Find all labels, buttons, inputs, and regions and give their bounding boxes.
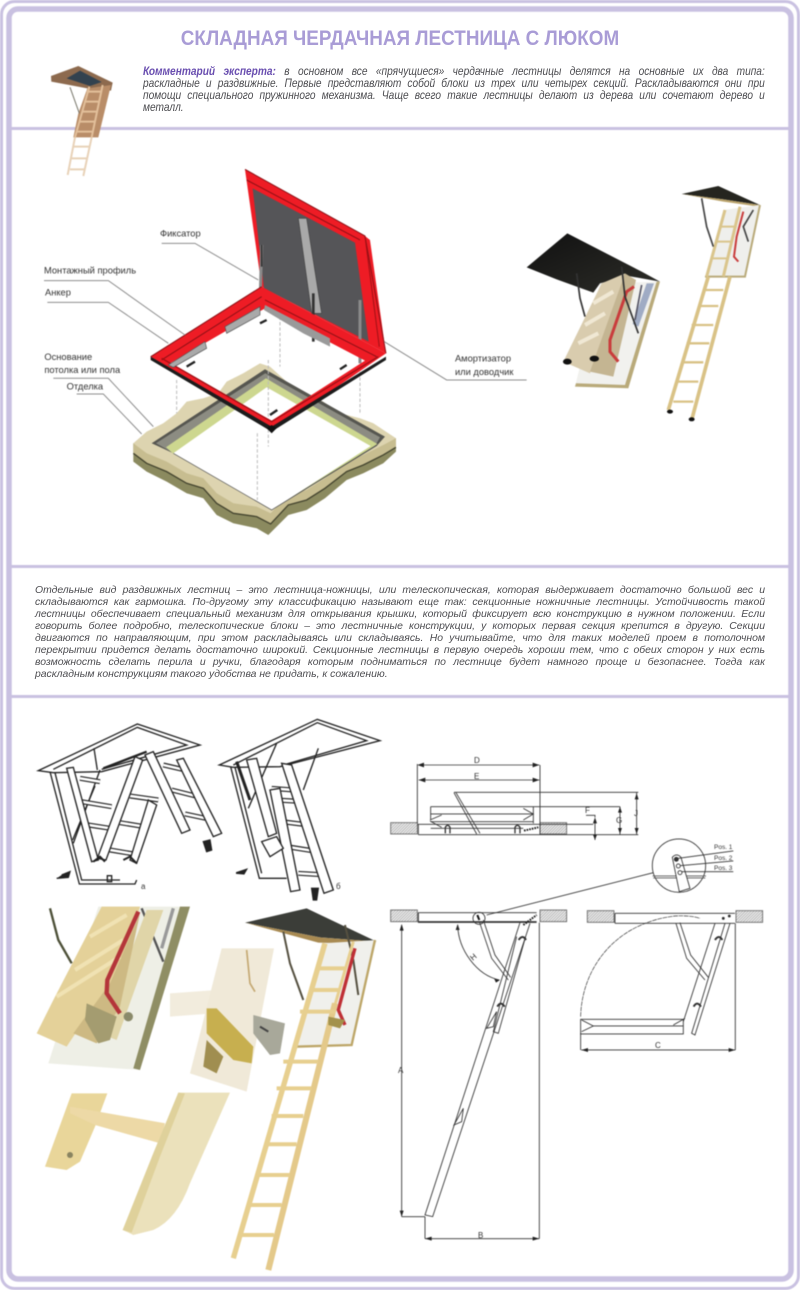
dimension letters, top view: J [634,809,638,818]
chart: drawing b, telescopic ladder [219,719,380,900]
chart: drawing a, scissor ladder [38,724,222,884]
chart: hatch exploded diagram [44,169,527,535]
position labels: Pos. 3 [714,865,733,872]
callout labels: Основание [44,352,92,362]
position labels [714,844,733,872]
lid [245,169,386,363]
dashed guides [177,317,360,500]
text block: expert comment: металл. [143,100,184,114]
dimension letters, top view: E [474,772,479,781]
dimension letters, top view: G [616,816,622,825]
text block: scissor and telescopic ladders: лестницы обеспечивает специальный механизм для открывания крышки, который фиксирует всю конструкцию в нужном положении. Если [35,609,765,620]
chart: magnified detail with positions [487,839,733,915]
text block: scissor and telescopic ladders: возможность сделать перила и ручки, благодаря которым подниматься по лестнице будет намного проще и безопаснее. Тогда как [35,657,765,668]
chart: technical drawing folding arc [581,911,763,1052]
text block: scissor and telescopic ladders: двигаются по направляющим, при этом раскладываясь или складываясь. Но учитывайте, что для таких моделей проем в потолочном [35,633,765,644]
dimension letters, extended ladder: A [398,1066,404,1075]
callout labels: Отделка [67,382,104,392]
callout labels: или доводчик [455,367,514,377]
photo: unfolded ladder [667,186,760,421]
text block: scissor and telescopic ladders: говорить более подробно, телескопические блоки – это лестничные конструкции, у которых первая секция крепится в другую. Секции [35,621,765,632]
dimension letters, top view [474,756,638,825]
dimension letters, top view: F [585,806,590,815]
callout labels: Амортизатор [455,353,511,363]
label: b: б [336,882,341,891]
text block: expert comment [142,64,765,114]
dimension letters, extended ladder [398,952,483,1240]
label: a: а [141,882,146,891]
callout labels: Анкер [45,287,71,297]
dimension letters, extended ladder: H [468,952,479,962]
dimension letters, top view: D [474,756,480,765]
text block: expert comment: помощи специального пружинного механизма. Чаще всего такие лестницы делают из дерева или сочетают дерево и [143,88,765,102]
chart: technical drawing top view [391,763,639,840]
text block: scissor and telescopic ladders: раскладным конструкциям такого удобства не придать, к сожалению. [35,669,388,680]
chart: technical drawing extended ladder [391,910,567,1241]
text block: scissor and telescopic ladders [34,585,766,680]
callout labels: Монтажный профиль [44,265,136,275]
frame [151,287,386,433]
photo: folded ladder with open lid [527,233,660,388]
icon: attic ladder thumbnail [51,66,113,176]
position labels: Pos. 1 [714,844,733,851]
dimension letters, extended ladder: B [478,1231,483,1240]
callout labels [44,228,514,392]
text block: expert comment: раскладные и раздвижные. Первые представляют собой блоки из трех или четырех секций. Раскладываются они при [143,76,765,90]
callout labels: потолка или пола [44,365,121,375]
title: СКЛАДНАЯ ЧЕРДАЧНАЯ ЛЕСТНИЦА С ЛЮКОМ [181,26,619,50]
position labels: Pos. 2 [714,855,733,862]
callout labels: Фиксатор [160,228,201,238]
photo: red handle mechanism close-up [37,907,190,1070]
photo: rung and stringer close-up [45,1093,230,1235]
callout leader lines [44,243,527,434]
text block: expert comment: Комментарий эксперта: в основном все «прячущиеся» чердачные лестницы делятся на основные их два типа: [143,64,765,78]
text block: scissor and telescopic ladders: складываются как гармошка. По-другому эту классификацию называют еще так: секционные ножничные лестницы. Устойчивость такой [35,597,765,608]
base ring [133,363,396,535]
photo: brass hinge close-up [170,948,285,1092]
dimension letter C: C [655,1041,661,1050]
text block: scissor and telescopic ladders: Отдельные вид раздвижных лестниц – это лестница-ножницы, или телескопическая, которая выдерживает достаточно большой вес и [35,585,765,596]
photo: assembled ladder [233,908,377,1270]
text block: scissor and telescopic ladders: перекрытии придется делать достаточно широкий. Секционные лестницы в первую очередь хороши тем, что с обеих сторон у них есть [35,645,765,656]
